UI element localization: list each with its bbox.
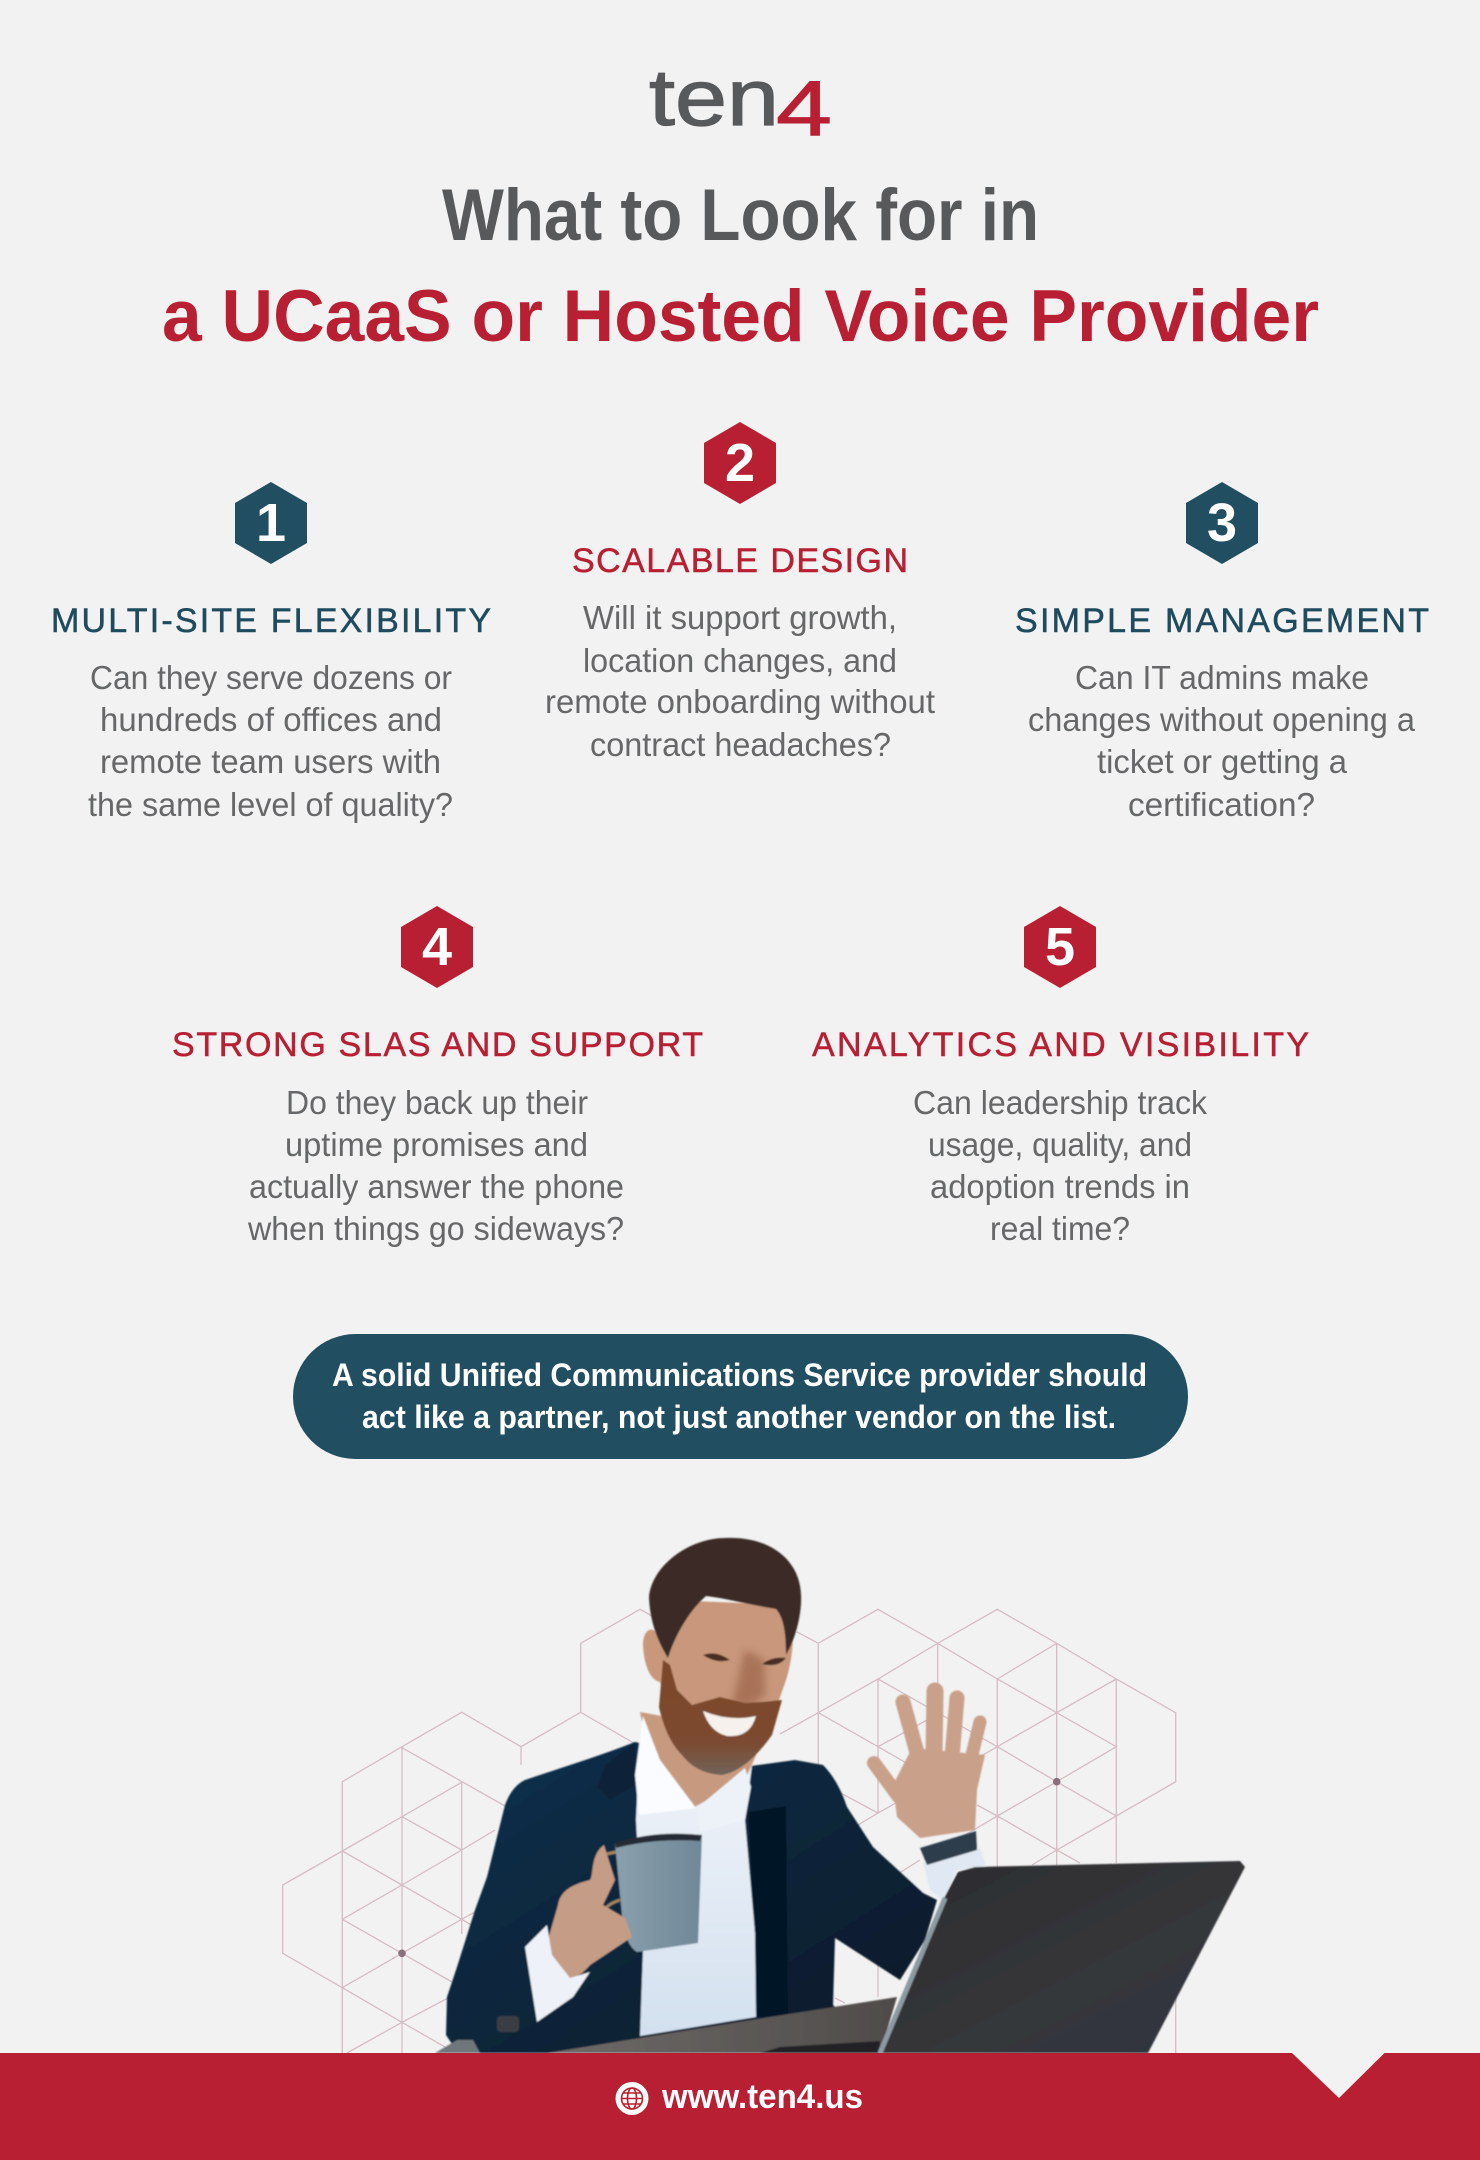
shirt <box>636 1735 756 2036</box>
cuff under watch <box>923 1848 986 1900</box>
face <box>643 1600 793 1760</box>
item 4: strong SLAs and support <box>172 906 703 1247</box>
text block: item 1 description: hundreds of offices and <box>100 701 442 738</box>
coffee mug <box>595 1834 702 1952</box>
text block: item 5 description <box>913 1084 1207 1247</box>
title: a UCaaS or Hosted Voice Provider <box>162 276 1319 357</box>
left lapel <box>597 1742 636 1800</box>
item 3: simple management <box>1015 482 1429 823</box>
item 2: scalable design <box>545 422 935 763</box>
footer band <box>0 2053 1480 2160</box>
text block: item 5 description: real time? <box>990 1210 1130 1247</box>
icon: hexagon number 5 <box>1024 906 1096 988</box>
eyes <box>703 1653 786 1665</box>
logo: ten4: ten <box>649 53 779 142</box>
hand holding mug <box>547 1845 632 1978</box>
text block: item 1 description: the same level of quality? <box>88 786 453 823</box>
item 5: analytics and visibility <box>812 906 1309 1247</box>
text block: item 2 description: Will it support growth, <box>583 599 897 636</box>
title: What to Look for in <box>442 175 1039 256</box>
text block: item 3 description <box>1028 659 1416 823</box>
neck <box>640 1712 765 1808</box>
logo: ten4 <box>649 53 832 152</box>
icon: hexagon number 5: 5 <box>1045 917 1075 977</box>
text block: item 1 description: Can they serve dozens or <box>90 659 452 696</box>
heading: simple management: SIMPLE MANAGEMENT <box>1015 602 1429 640</box>
text block: item 2 description: location changes, and <box>583 642 897 679</box>
logo: ten4: 4 <box>776 64 832 152</box>
collar <box>635 1716 696 1815</box>
waving hand <box>874 1691 985 1838</box>
hair <box>649 1538 801 1658</box>
icon: hexagon number 2: 2 <box>725 433 755 493</box>
text block: item 4 description: uptime promises and <box>285 1126 588 1163</box>
text block: item 4 description <box>247 1084 624 1247</box>
heading: scalable design: SCALABLE DESIGN <box>572 542 908 580</box>
icon: hexagon number 3: 3 <box>1207 493 1237 553</box>
text block: item 2 description <box>545 599 935 763</box>
icon: hexagon number 4: 4 <box>422 917 452 977</box>
beard <box>659 1660 782 1775</box>
laptop <box>878 1861 1245 2053</box>
text block: item 5 description: Can leadership track <box>913 1084 1207 1121</box>
callout pill <box>293 1334 1188 1459</box>
text block: item 1 description: remote team users with <box>100 743 441 780</box>
icon: globe <box>616 2082 648 2115</box>
smile <box>703 1711 756 1736</box>
item 1: multi-site flexibility <box>51 482 491 823</box>
icon: hexagon number 1 <box>235 482 307 564</box>
text block: item 5 description: adoption trends in <box>930 1168 1190 1205</box>
text block: item 3 description: changes without opening a <box>1028 701 1416 738</box>
text block: item 2 description: contract headaches? <box>590 726 891 763</box>
text block: item 2 description: remote onboarding without <box>545 683 935 720</box>
icon: hexagon number 4 <box>401 906 473 988</box>
jacket <box>446 1742 937 2053</box>
title <box>162 175 1319 357</box>
callout pill: act like a partner, not just another vendor on the list. <box>362 1399 1116 1435</box>
sleeve buttons <box>497 2016 519 2032</box>
shirt cuff <box>525 1925 590 2022</box>
text block: item 4 description: when things go sideways? <box>247 1210 624 1247</box>
text block: item 1 description <box>88 659 453 823</box>
nose shadow <box>732 1650 765 1708</box>
heading: multi-site flexibility: MULTI-SITE FLEXIBILITY <box>51 602 491 640</box>
desk <box>547 1997 897 2053</box>
icon: hexagon number 3 <box>1186 482 1258 564</box>
photo: smiling man waving with mug at laptop <box>435 1538 1245 2053</box>
heading: strong SLAs and support: STRONG SLAS AND SUPPORT <box>172 1026 703 1064</box>
icon: hexagon number 2 <box>704 422 776 504</box>
desk object <box>435 2040 480 2053</box>
hexagon line pattern <box>283 1609 1176 2053</box>
text block: item 3 description: Can IT admins make <box>1075 659 1369 696</box>
icon: hexagon number 1: 1 <box>256 493 286 553</box>
text block: item 4 description: Do they back up their <box>286 1084 588 1121</box>
text block: item 3 description: ticket or getting a <box>1097 743 1348 780</box>
watch <box>920 1831 977 1865</box>
heading: analytics and visibility: ANALYTICS AND VISIBILITY <box>812 1026 1309 1064</box>
right lapel <box>748 1806 788 2017</box>
callout pill: A solid Unified Communications Service provider should <box>332 1357 1147 1393</box>
text block: item 3 description: certification? <box>1128 786 1315 823</box>
text block: item 4 description: actually answer the phone <box>249 1168 624 1205</box>
footer URL: www.ten4.us <box>661 2078 863 2116</box>
text block: item 5 description: usage, quality, and <box>928 1126 1192 1163</box>
